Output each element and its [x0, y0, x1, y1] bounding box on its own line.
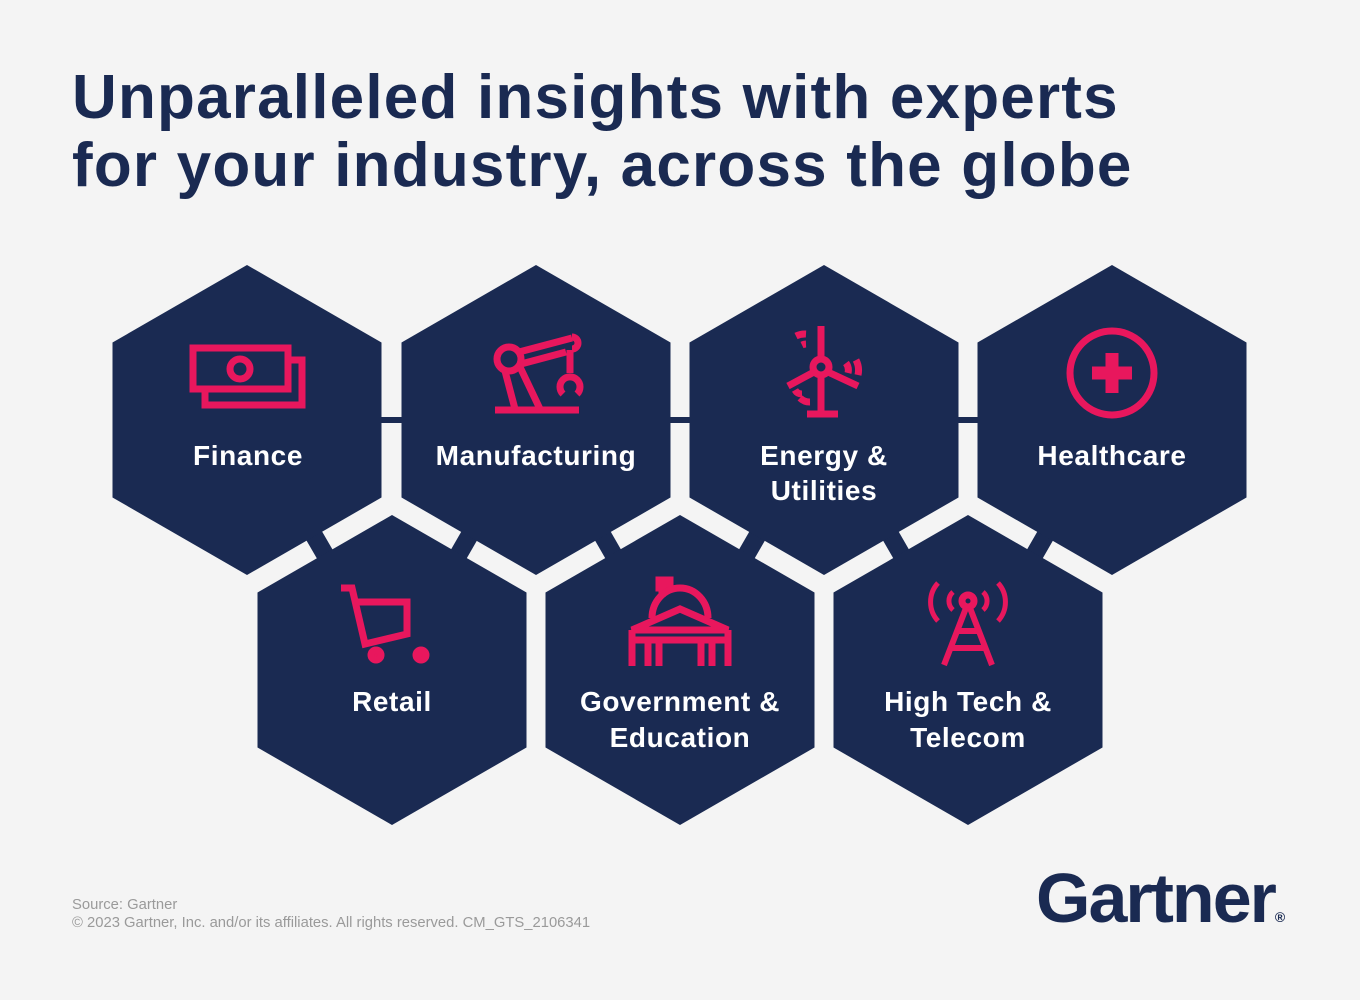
- icon: retail: [341, 588, 426, 660]
- label: retail: Retail: [352, 686, 432, 717]
- label: telecom: High Tech &: [884, 686, 1052, 717]
- label: healthcare: Healthcare: [1037, 440, 1187, 471]
- logo: Gartner®: [1036, 859, 1283, 937]
- icon: manufacturing: [495, 337, 580, 410]
- label: energy: Energy &: [760, 440, 888, 471]
- icon: government: [632, 580, 728, 666]
- source footnote: Source: Gartner: [72, 897, 177, 913]
- icon: healthcare: [1070, 331, 1154, 415]
- label: government: Education: [610, 722, 750, 753]
- icon: finance: [193, 348, 302, 405]
- source footnote: [72, 897, 590, 931]
- label: finance: Finance: [193, 440, 303, 471]
- label: government: Government &: [580, 686, 780, 717]
- title: Unparalleled insights with experts: [72, 63, 1119, 132]
- icon: energy: [788, 326, 859, 414]
- icon: telecom: [931, 583, 1005, 665]
- title: [72, 63, 1133, 200]
- source footnote: © 2023 Gartner, Inc. and/or its affiliates. All rights reserved. CM_GTS_2106341: [72, 915, 590, 931]
- title: for your industry, across the globe: [72, 131, 1133, 200]
- label: energy: Utilities: [771, 475, 877, 506]
- label: telecom: Telecom: [910, 722, 1026, 753]
- label: manufacturing: Manufacturing: [436, 440, 636, 471]
